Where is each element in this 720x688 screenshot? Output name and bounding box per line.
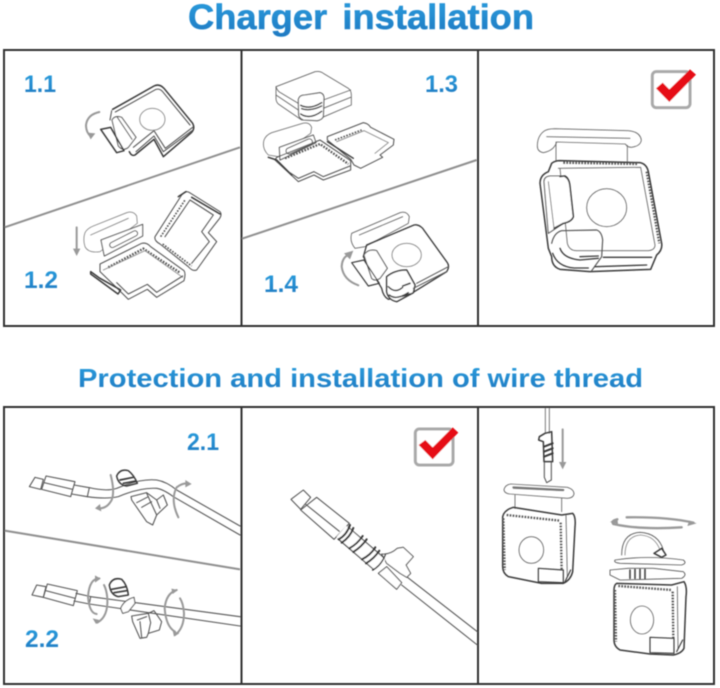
icon: down arrow 1.2	[73, 227, 80, 256]
icon: cable with spiral protector	[291, 490, 477, 645]
icon: assembled charger	[537, 129, 662, 272]
icon: red check in box	[652, 69, 696, 108]
icon: charger with wound cable	[610, 532, 686, 655]
step label 1.1: 1.1	[24, 71, 56, 98]
panel: assembled charger with check	[537, 69, 696, 272]
icon: charger case closed 1.1	[101, 85, 194, 157]
icon: cable inserted from above	[539, 408, 553, 483]
icon: cable with clip 2.1	[29, 470, 240, 535]
icon: rotate arrow 1.4	[342, 251, 358, 285]
icon: open case 1.3	[263, 123, 394, 182]
panel: steps 2.1 and 2.2	[5, 429, 240, 653]
icon: charger with cap	[503, 484, 575, 583]
icon: charger in case 1.4	[351, 212, 449, 302]
divider line between 1.3 and 1.4	[242, 160, 477, 239]
panel: protected cable with check	[291, 427, 477, 645]
step label 2.1: 2.1	[187, 429, 219, 456]
panel: charger installation steps grid	[4, 50, 714, 326]
icon: red check in box	[415, 427, 458, 465]
step label 2.2: 2.2	[25, 626, 59, 653]
icon: cap piece 1.2	[84, 212, 143, 256]
panel: wire protection steps grid	[4, 407, 714, 684]
icon: down arrow	[559, 429, 566, 469]
icon: rotate arrow 1.1	[86, 112, 99, 139]
panel: steps 1.3 and 1.4	[242, 71, 477, 302]
step label 1.4: 1.4	[264, 271, 299, 298]
icon: open case 1.2	[91, 192, 221, 299]
icon: cable with clip 2.2	[32, 579, 240, 638]
divider line between 2.1 and 2.2	[5, 531, 240, 569]
panel: steps 1.1 and 1.2	[5, 71, 240, 299]
step label 1.3: 1.3	[425, 71, 458, 98]
icon: rotate arrows 2.1	[95, 475, 192, 517]
icon: rotate arrows 2.2	[88, 575, 184, 637]
heading: Protection and installation of wire thread: Protection and installation of wire thread	[78, 363, 643, 393]
icon: rotate arrows around wound charger	[610, 517, 697, 528]
panel: charger with wound cable	[503, 408, 697, 655]
icon: charger block 1.3	[276, 71, 351, 121]
divider line between 1.1 and 1.2	[5, 147, 240, 227]
step label 1.2: 1.2	[24, 267, 58, 294]
